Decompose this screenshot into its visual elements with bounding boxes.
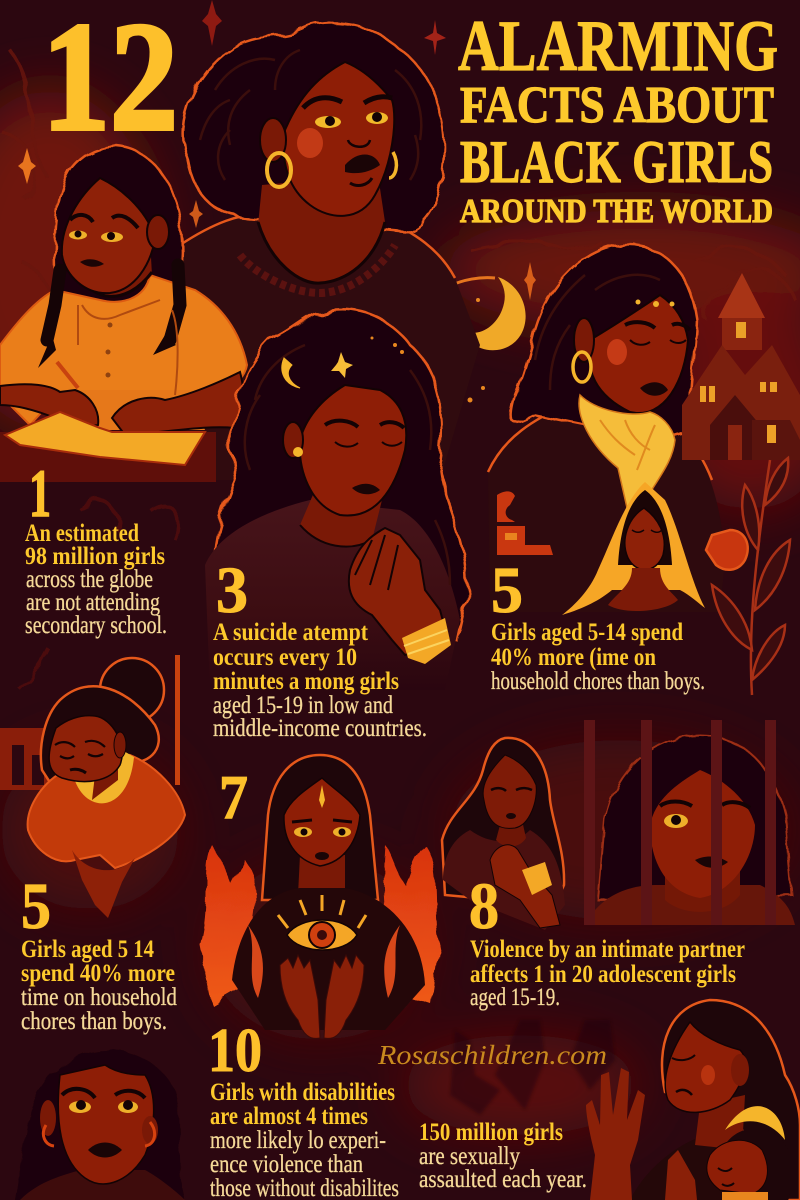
fact 1: [25, 455, 167, 639]
fact 5: chores, left: 5: [21, 870, 51, 943]
illustration: plant with rose: [706, 458, 790, 695]
fact 3: aged 15-19 in low and: [213, 692, 393, 719]
fact 5: chores, left: [21, 870, 177, 1035]
fact 1: across the globe: [26, 566, 153, 593]
fact 5: chores, right: household chores than boys.: [491, 668, 705, 695]
fact 8: 8: [469, 870, 499, 943]
fact 10: Girls with disabilities: [210, 1079, 395, 1106]
fact: 150 million girls: are sexually: [419, 1143, 520, 1170]
fact 5: chores, left: Girls aged 5 14: [21, 936, 154, 963]
illustration: girl behind bars: [584, 720, 795, 925]
fact 10: ence violence than: [210, 1151, 363, 1178]
stars and sparkles: [18, 0, 536, 346]
fact 5: chores, left: time on household: [21, 984, 177, 1011]
title: alarming facts: [458, 6, 778, 230]
fact 1: 1: [29, 455, 51, 531]
illustration: girl with flames and eye: [200, 755, 440, 1038]
illustration: bottom left face: [15, 1050, 185, 1200]
fact 10: 10: [208, 1017, 262, 1085]
illustration: mother and child: [586, 1000, 800, 1200]
fact: 150 million girls: 150 million girls: [419, 1119, 563, 1146]
fact 1: are not attending: [26, 589, 160, 616]
fact 5: chores, left: chores than boys.: [21, 1008, 167, 1035]
illustration: woman top center: [160, 23, 480, 480]
illustration: woman with yellow scarf: [488, 244, 725, 615]
fact 10: [208, 1017, 399, 1200]
fact 7 number: 7: [219, 764, 248, 832]
crescent moon: [415, 277, 526, 402]
fact 10: are almost 4 times: [210, 1103, 368, 1130]
fact 1: An estimated: [25, 520, 139, 547]
illustration: shadow hands: [450, 1020, 615, 1115]
fact 3: occurs every 10: [213, 644, 357, 671]
illustration: small girl with bandaged wrist: [442, 738, 565, 930]
fact: 150 million girls: [419, 1119, 587, 1193]
fact 3: A suicide atempt: [213, 619, 369, 646]
fact 8: aged 15-19.: [470, 984, 560, 1011]
fact: 150 million girls: assaulted each year.: [419, 1166, 587, 1193]
fact 3: middle-income countries.: [213, 715, 427, 742]
illustration: girl with hair bun: [0, 655, 185, 918]
illustration: girl writing in a notebook: [0, 147, 247, 482]
fact 5: chores, right: Girls aged 5-14 spend: [491, 619, 683, 646]
website credit: Rosaschildren.com: [377, 1040, 607, 1070]
fact 1: secondary school.: [25, 612, 167, 639]
fact 5: chores, right: [491, 554, 705, 695]
fact 3: 3: [216, 554, 248, 627]
fact 3: [213, 554, 427, 742]
fact 10: more likely lo experi-: [210, 1127, 386, 1154]
illustration: praying girl with stars in her hair: [205, 309, 466, 690]
fact 1: 98 million girls: [25, 543, 165, 570]
fact 3: minutes a mong girls: [213, 668, 399, 695]
fact 5: chores, left: spend 40% more: [21, 960, 175, 987]
illustration: house: [682, 273, 800, 460]
fact 5: chores, right: 40% more (ime on: [491, 644, 656, 671]
fact 8: Violence by an intimate partner: [470, 936, 745, 963]
fact 8: affects 1 in 20 adolescent girls: [470, 961, 736, 988]
fact 8: [469, 870, 745, 1011]
fact 5: chores, right: 5: [491, 554, 523, 627]
